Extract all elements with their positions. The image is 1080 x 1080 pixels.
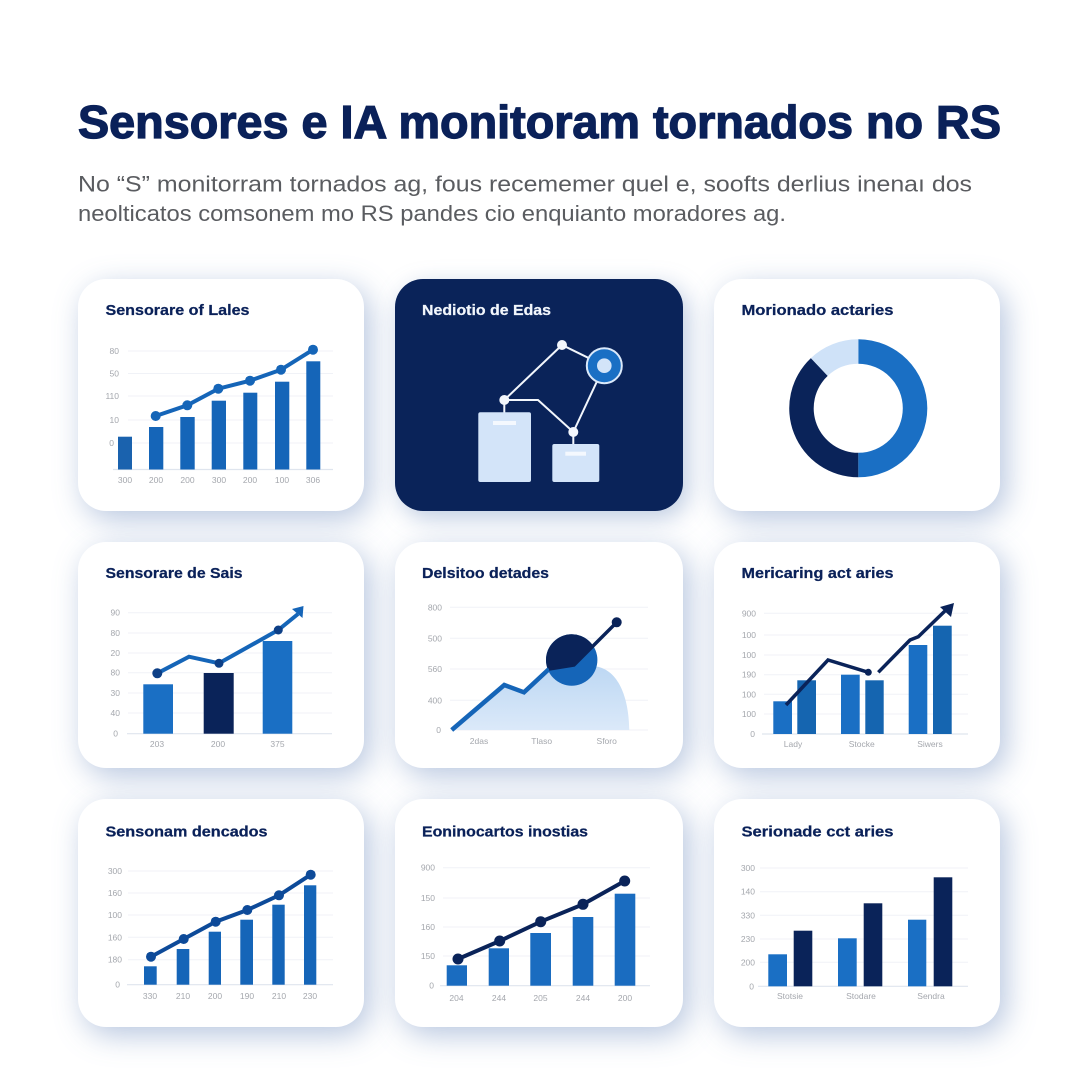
bar and line chart: 244	[576, 993, 590, 1003]
bar and line chart: 80	[111, 668, 120, 678]
bar and line chart: 100	[275, 475, 289, 485]
bar and line chart: 200	[211, 739, 225, 749]
grouped bar and line chart	[742, 603, 968, 749]
intro text	[78, 172, 972, 226]
heading: Sensonam dencados	[106, 824, 268, 840]
panel: Morionado actaries	[714, 279, 1000, 511]
area and line chart: 560	[428, 664, 442, 674]
area and line chart: Sforo	[597, 736, 617, 746]
bar and line chart	[108, 866, 333, 1001]
title: Sensores e IA monitoram tornados no RS	[78, 96, 1001, 148]
bar and line chart: 205	[533, 993, 548, 1003]
area and line chart: 2das	[470, 736, 488, 746]
bar and line chart: 0	[113, 729, 118, 739]
area and line chart: Tlaso	[531, 736, 552, 746]
panel: Sensorare de Sais	[78, 542, 364, 768]
bar and line chart: 100	[108, 910, 122, 920]
area and line chart	[428, 602, 648, 746]
grouped bar chart: Stotsie	[777, 991, 803, 1001]
donut chart	[789, 339, 927, 477]
area and line chart: 800	[428, 602, 442, 612]
bar and line chart: 150	[421, 951, 435, 961]
grouped bar and line chart: Lady	[784, 739, 803, 749]
grouped bar and line chart: Siwers	[917, 739, 943, 749]
grouped bar chart: 300	[741, 863, 755, 873]
bar and line chart: 160	[108, 888, 122, 898]
intro text: neolticatos comsonem mo RS pandes cio enquianto moradores ag.	[78, 201, 786, 226]
grouped bar chart: 0	[749, 981, 754, 991]
grouped bar and line chart: 0	[750, 729, 755, 739]
grouped bar and line chart: 100	[742, 650, 756, 660]
bar and line chart: 230	[303, 991, 317, 1001]
bar and line chart: 160	[421, 922, 435, 932]
bar and line chart: 30	[111, 688, 120, 698]
grouped bar and line chart: 900	[742, 608, 756, 618]
bar and line chart: 204	[449, 993, 464, 1003]
bar and line chart	[111, 606, 332, 749]
grouped bar chart: Sendra	[917, 991, 945, 1001]
bar and line chart: 200	[618, 993, 632, 1003]
area and line chart: 0	[436, 725, 441, 735]
panel: Sensonam dencados	[78, 799, 364, 1027]
panel: Serionade cct aries	[714, 799, 1000, 1027]
bar and line chart: 200	[149, 475, 163, 485]
grouped bar chart: 330	[741, 910, 755, 920]
area and line chart: 400	[428, 695, 442, 705]
bar and line chart: 200	[208, 991, 222, 1001]
intro text: No “S” monitorram tornados ag, fous recememer quel e, soofts derlius inenaı dos	[78, 172, 972, 196]
bar and line chart: 375	[270, 739, 285, 749]
bar and line chart: 306	[306, 475, 320, 485]
heading: Eoninocartos inostias	[422, 824, 588, 840]
bar and line chart: 40	[111, 708, 120, 718]
bar and line chart: 180	[108, 955, 122, 965]
panel: Mericaring act aries	[714, 542, 1000, 768]
bar and line chart: 160	[108, 932, 122, 942]
heading: Sensorare of Lales	[106, 302, 250, 319]
heading: Delsitoo detades	[422, 565, 549, 582]
bar and line chart: 210	[272, 991, 286, 1001]
heading: Sensorare de Sais	[106, 565, 242, 582]
bar and line chart: 0	[429, 981, 434, 991]
grouped bar chart: 200	[741, 957, 755, 967]
bar and line chart: 80	[110, 346, 119, 356]
grouped bar chart	[741, 863, 968, 1001]
bar and line chart: 330	[143, 991, 157, 1001]
bar and line chart: 900	[421, 863, 435, 873]
bar and line chart: 300	[108, 866, 122, 876]
area and line chart: 500	[428, 633, 442, 643]
bar and line chart: 244	[492, 993, 506, 1003]
bar and line chart: 300	[212, 475, 226, 485]
bar and line chart: 210	[176, 991, 190, 1001]
bar and line chart: 200	[180, 475, 195, 485]
bar and line chart: 10	[110, 415, 119, 425]
bar and line chart: 190	[240, 991, 254, 1001]
grouped bar and line chart: Stocke	[849, 739, 875, 749]
bar and line chart: 80	[111, 628, 120, 638]
bar and line chart	[421, 863, 650, 1003]
bar and line chart: 90	[111, 608, 120, 618]
panel: Sensorare of Lales	[78, 279, 364, 511]
bar and line chart: 203	[150, 739, 164, 749]
heading: Mericaring act aries	[742, 565, 894, 582]
heading: Serionade cct aries	[742, 824, 894, 840]
panel: Eoninocartos inostias	[395, 799, 683, 1027]
bar and line chart	[105, 345, 333, 485]
bar and line chart: 150	[421, 893, 435, 903]
heading: Morionado actaries	[742, 302, 894, 319]
grouped bar chart: 140	[741, 887, 755, 897]
panel: Nediotio de Edas	[395, 279, 683, 511]
bar and line chart: 0	[109, 438, 114, 448]
bar and line chart: 0	[115, 980, 120, 990]
grouped bar chart: 230	[741, 934, 755, 944]
grouped bar and line chart: 100	[742, 689, 756, 699]
heading: Nediotio de Edas	[422, 302, 551, 319]
bar and line chart: 50	[110, 368, 119, 378]
grouped bar and line chart: 190	[742, 670, 756, 680]
grouped bar chart: Stodare	[846, 991, 876, 1001]
bar and line chart: 20	[111, 648, 120, 658]
bar and line chart: 300	[118, 475, 132, 485]
network diagram icon	[478, 340, 622, 482]
bar and line chart: 110	[105, 391, 119, 401]
grouped bar and line chart: 100	[742, 630, 756, 640]
bar and line chart: 200	[243, 475, 257, 485]
panel: Delsitoo detades	[395, 542, 683, 768]
grouped bar and line chart: 100	[742, 709, 756, 719]
